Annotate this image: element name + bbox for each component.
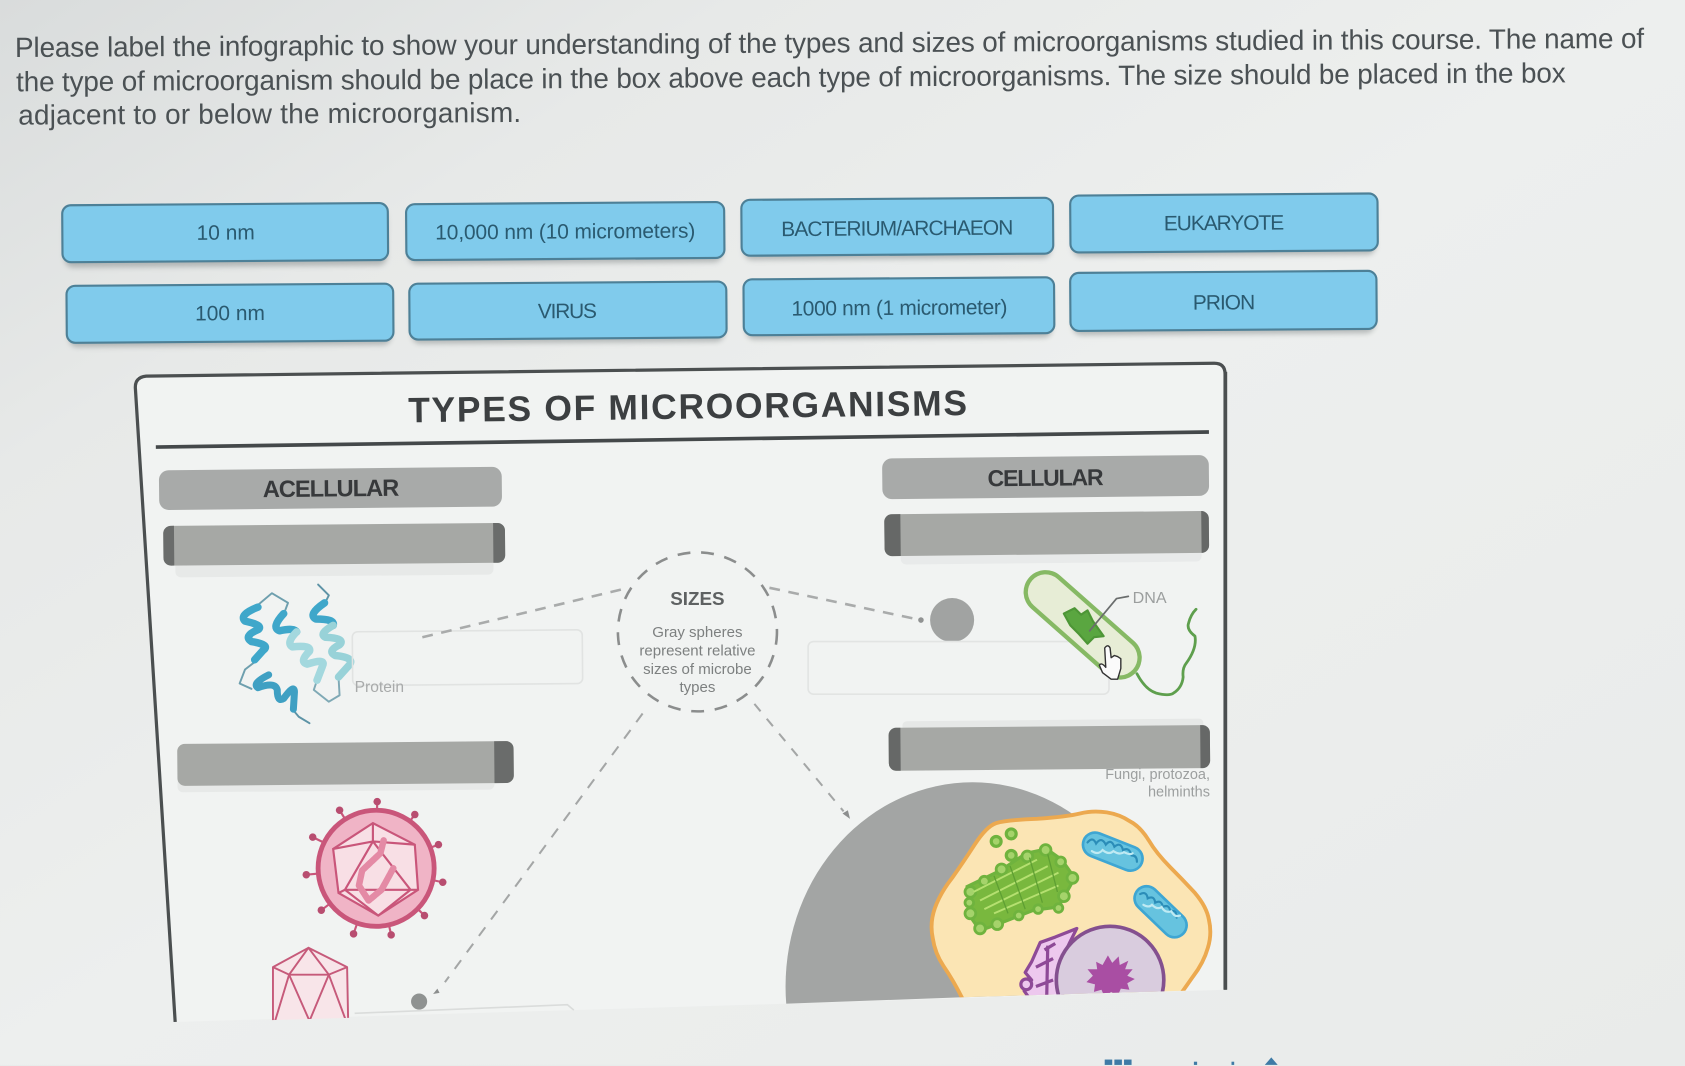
answer buttons — [62, 193, 1378, 347]
dashed connector to prion sphere — [422, 588, 629, 637]
empty size box: cellular — [808, 642, 1109, 694]
icon: virus capsid — [273, 948, 348, 1023]
heading: cellular: CELLULAR — [987, 464, 1104, 491]
button: 10 nm — [62, 203, 388, 268]
instructions text: Please label the infographic to show your understanding of the types and sizes of microorganisms studied in this course. The name of — [15, 23, 1644, 63]
instructions text: adjacent to or below the microorganism. — [18, 97, 521, 131]
button: 1000 nm — [743, 277, 1054, 340]
arrow to virus sphere — [433, 714, 643, 994]
panel right edge — [1224, 372, 1227, 990]
button: 100 nm — [66, 284, 394, 347]
button: prion — [1070, 271, 1377, 335]
button: 10,000 nm — [406, 202, 725, 264]
callout: sizes: sizes of microbe — [643, 661, 752, 678]
arrow to eukaryote sphere — [754, 704, 850, 819]
callout: sizes — [618, 552, 777, 711]
icon: bacterium — [1046, 592, 1196, 695]
heading: acellular — [159, 467, 502, 510]
caption: protein — [352, 630, 583, 696]
panel: types of microorganisms — [135, 363, 1227, 1066]
arrow to bacterium sphere — [769, 588, 924, 623]
button: virus — [409, 282, 727, 344]
organelle: mitochondrion — [1088, 840, 1137, 862]
caption: fungi, protozoa, helminths: Fungi, protozoa, — [1105, 767, 1210, 783]
icon: hand cursor — [1099, 646, 1121, 679]
heading: acellular: ACELLULAR — [263, 476, 399, 503]
button: eukaryote: EUKARYOTE — [1164, 212, 1284, 235]
callout: sizes: Gray spheres — [652, 624, 743, 641]
organelle: endoplasmic reticulum — [965, 845, 1078, 934]
button: bacterium/archaeon — [741, 198, 1053, 260]
button: 1000 nm: 1000 nm (1 micrometer) — [791, 296, 1008, 321]
drop slot: acellular type 2 — [177, 741, 514, 792]
panel title: TYPES OF MICROORGANISMS — [408, 383, 967, 430]
button: 100 nm: 100 nm — [195, 302, 265, 325]
instructions text — [15, 23, 1644, 131]
caption: fungi, protozoa, helminths: helminths — [1148, 784, 1210, 800]
caption: protein: Protein — [355, 679, 404, 696]
icon: eukaryotic cell — [930, 810, 1212, 998]
callout: sizes: types — [679, 679, 715, 696]
callout: sizes: represent relative — [639, 643, 755, 660]
callout: sizes: SIZES — [670, 588, 725, 609]
button: virus: VIRUS — [538, 300, 597, 323]
label: DNA: DNA — [1133, 589, 1167, 607]
drop slot: cellular type 2 — [888, 719, 1210, 771]
heading: cellular — [882, 455, 1209, 499]
sphere: bacterium size — [930, 598, 974, 642]
caption: fungi, protozoa, helminths — [1105, 767, 1210, 800]
button: eukaryote — [1070, 193, 1378, 257]
icon: protein ribbon — [240, 585, 351, 723]
organelle: mitochondrion — [1140, 893, 1180, 925]
organelle: nucleus — [1054, 924, 1166, 994]
organelle: vesicles — [991, 829, 1016, 860]
drop slot: cellular type 1 — [884, 511, 1209, 565]
drop slot: acellular type 1 — [163, 523, 505, 577]
button: 10,000 nm: 10,000 nm (10 micrometers) — [435, 220, 695, 244]
instructions text: the type of microorganism should be place in the box above each type of microorganisms. The size should be placed in the box — [16, 57, 1566, 97]
button: bacterium/archaeon: BACTERIUM/ARCHAEON — [781, 217, 1013, 241]
icon: virus — [303, 798, 447, 939]
panel frame — [135, 363, 1225, 1022]
sphere: eukaryote size — [786, 782, 1157, 1004]
button: prion: PRION — [1193, 291, 1255, 315]
button: 10 nm: 10 nm — [197, 221, 255, 245]
next button controls, cut off by photo edge — [1105, 1057, 1278, 1065]
organelle: rough ER — [1021, 928, 1077, 1002]
sphere: virus size — [411, 993, 427, 1010]
